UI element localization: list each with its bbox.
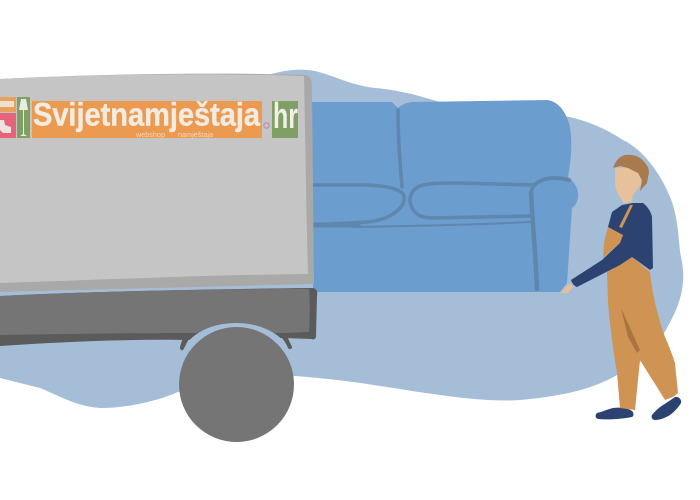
logo hr: hr [273,95,298,136]
overall strap [619,205,633,228]
chassis face [0,289,310,335]
sofa [312,100,578,292]
logo tagline left: webshop [135,132,165,139]
left flap [180,334,190,350]
cargo box side strip [0,74,314,292]
truck [0,74,317,442]
overalls [607,257,678,410]
shirt [571,203,653,287]
cargo box [0,74,308,283]
overalls bib [603,227,623,258]
sofa seam lines [313,110,569,289]
hand [560,283,573,293]
logo tagline right: namještaja [178,132,213,139]
hair [613,155,649,191]
wheel arch gap [181,323,291,352]
logo name: Svijetnamještaja [33,96,260,132]
back shoe [596,408,634,419]
background blob [0,70,683,408]
face and neck [615,167,642,203]
logo [0,95,298,139]
logo icon: lamp tile [17,97,30,138]
sofa body [312,100,578,292]
front shoe [652,397,681,420]
logo name bar [32,101,262,138]
logo icon: sofa tiles [0,97,16,112]
logo hr tile [272,101,298,138]
right flap [280,333,292,349]
overalls leg fold [621,308,640,353]
mover [560,155,681,420]
logo dot [264,123,269,128]
chassis [0,288,317,346]
wheel [179,327,294,442]
